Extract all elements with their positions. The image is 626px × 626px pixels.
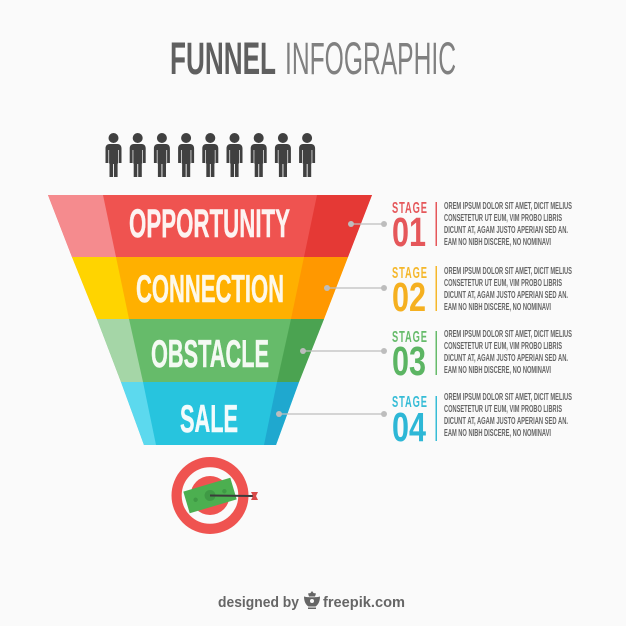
connector: stage 1 xyxy=(348,221,387,227)
connector: stage 4 xyxy=(276,411,387,417)
title: FUNNEL xyxy=(170,33,276,84)
footer credit xyxy=(218,591,405,611)
panel: opportunity band xyxy=(48,195,372,257)
stage 3 block: EAM NO NIBH DISCERE, NO NOMINAVI xyxy=(444,365,551,376)
stage 3 block: STAGE xyxy=(392,327,428,346)
stage 4 block xyxy=(392,392,572,450)
stage 4 block: 04 xyxy=(392,404,426,450)
title xyxy=(170,33,456,84)
stage 2 block xyxy=(392,263,572,320)
panel: sale band: SALE xyxy=(180,398,238,441)
stage 4 block: STAGE xyxy=(392,392,428,411)
icon: arrow xyxy=(210,492,258,500)
stage 1 block: EAM NO NIBH DISCERE, NO NOMINAVI xyxy=(444,237,551,248)
stage 2 block: STAGE xyxy=(392,263,428,282)
stage 1 block: STAGE xyxy=(392,198,428,217)
stage 1 block: 01 xyxy=(392,209,426,255)
panel: connection band xyxy=(72,257,348,319)
stage 3 block xyxy=(392,327,572,384)
title: INFOGRAPHIC xyxy=(285,33,456,84)
panel: obstacle band: OBSTACLE xyxy=(151,333,269,376)
icon: banknote xyxy=(183,478,237,513)
stage 2 block: 02 xyxy=(392,274,426,320)
funnel chart xyxy=(48,195,372,445)
stage 3 block: 03 xyxy=(392,338,426,384)
panel: sale band xyxy=(121,382,299,445)
stage 2 block: EAM NO NIBH DISCERE, NO NOMINAVI xyxy=(444,302,551,313)
footer credit: designed by xyxy=(218,595,299,611)
connector: stage 2 xyxy=(324,285,387,291)
panel: connection band: CONNECTION xyxy=(136,268,284,311)
icon: target with money and arrow xyxy=(177,462,258,529)
panel: opportunity band: OPPORTUNITY xyxy=(129,202,290,246)
stage 4 block: EAM NO NIBH DISCERE, NO NOMINAVI xyxy=(444,428,551,439)
icon: freepik logo xyxy=(304,591,320,609)
stage 1 block xyxy=(392,198,572,255)
footer credit: freepik.com xyxy=(323,595,405,611)
icon: row of people xyxy=(106,133,315,177)
panel: obstacle band xyxy=(97,319,324,382)
connector: stage 3 xyxy=(300,348,387,354)
